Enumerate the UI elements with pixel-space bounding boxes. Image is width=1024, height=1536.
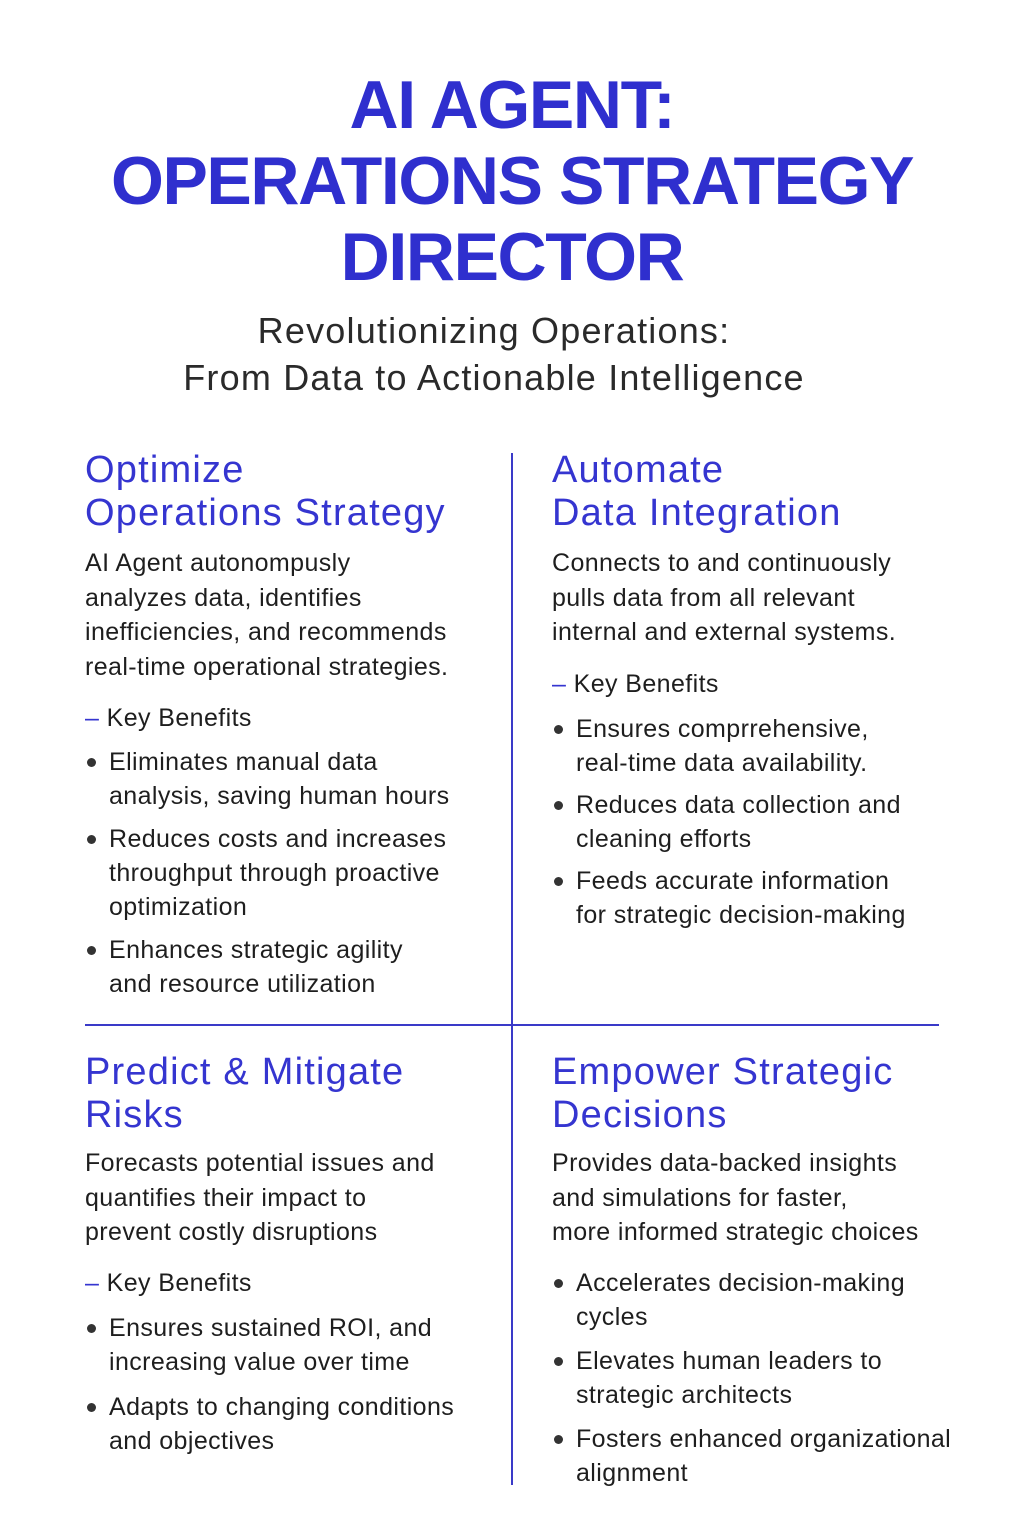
- title: AI AGENT:: [350, 67, 674, 143]
- heading: [85, 1051, 404, 1136]
- bullet list: [554, 715, 906, 929]
- heading: [85, 449, 446, 534]
- panel: optimize: analysis, saving human hours: [109, 782, 450, 810]
- panel: automate: Ensures comprrehensive,: [576, 715, 869, 743]
- panel: automate: cleaning efforts: [576, 825, 752, 853]
- description: inefficiencies, and recommends: [85, 618, 447, 646]
- heading: Empower Strategic: [552, 1051, 893, 1093]
- panel: empower: alignment: [576, 1459, 688, 1487]
- description: analyzes data, identifies: [85, 584, 362, 612]
- description: pulls data from all relevant: [552, 584, 855, 612]
- horizontal divider: [85, 1024, 939, 1026]
- panel: automate: real-time data availability.: [576, 749, 867, 777]
- bullet list: [87, 1314, 454, 1455]
- bullet list: [554, 1269, 951, 1487]
- heading: Operations Strategy: [85, 492, 446, 534]
- title: OPERATIONS STRATEGY: [111, 143, 913, 219]
- key benefits label: Key Benefits: [574, 670, 719, 698]
- subtitle: From Data to Actionable Intelligence: [183, 357, 805, 398]
- description: [552, 1149, 919, 1246]
- panel: empower: Fosters enhanced organizational: [576, 1425, 951, 1453]
- vertical divider: [511, 453, 513, 1485]
- description: Forecasts potential issues and: [85, 1149, 435, 1177]
- description: and simulations for faster,: [552, 1184, 848, 1212]
- panel: optimize: Enhances strategic agility: [109, 936, 403, 964]
- panel: automate: [552, 449, 906, 929]
- panel: predict: [85, 1051, 454, 1455]
- description: Connects to and continuously: [552, 549, 891, 577]
- panel: optimize: Reduces costs and increases: [109, 825, 446, 853]
- panel: automate: Reduces data collection and: [576, 791, 901, 819]
- panel: empower: Accelerates decision-making: [576, 1269, 905, 1297]
- heading: Decisions: [552, 1094, 728, 1136]
- panel: predict: Adapts to changing conditions: [109, 1393, 454, 1421]
- description: [85, 1149, 435, 1246]
- key benefits label: Key Benefits: [107, 704, 252, 732]
- panel: predict: and objectives: [109, 1427, 274, 1455]
- panel: empower: strategic architects: [576, 1381, 792, 1409]
- description: more informed strategic choices: [552, 1218, 919, 1246]
- description: quantifies their impact to: [85, 1184, 366, 1212]
- description: real-time operational strategies.: [85, 652, 448, 680]
- description: prevent costly disruptions: [85, 1218, 377, 1246]
- bullet list: [87, 748, 450, 998]
- heading: Data Integration: [552, 492, 842, 534]
- panel: optimize: [85, 449, 450, 998]
- heading: [552, 449, 842, 534]
- heading: Automate: [552, 449, 724, 491]
- description: Provides data-backed insights: [552, 1149, 897, 1177]
- subtitle: Revolutionizing Operations:: [258, 310, 730, 351]
- heading: Predict & Mitigate: [85, 1051, 404, 1093]
- panel: predict: increasing value over time: [109, 1348, 410, 1376]
- title: DIRECTOR: [341, 219, 683, 295]
- heading: [552, 1051, 893, 1136]
- panel: optimize: throughput through proactive: [109, 859, 440, 887]
- description: internal and external systems.: [552, 618, 896, 646]
- panel: empower: Elevates human leaders to: [576, 1347, 882, 1375]
- heading: Optimize: [85, 449, 245, 491]
- panel: empower: cycles: [576, 1303, 648, 1331]
- panel: optimize: and resource utilization: [109, 970, 376, 998]
- panel: optimize: optimization: [109, 893, 247, 921]
- panel: predict: Ensures sustained ROI, and: [109, 1314, 432, 1342]
- title: [111, 67, 914, 295]
- description: [552, 549, 896, 646]
- description: [85, 549, 448, 680]
- description: AI Agent autonompusly: [85, 549, 351, 577]
- panel: optimize: Eliminates manual data: [109, 748, 378, 776]
- panel: automate: for strategic decision-making: [576, 901, 906, 929]
- panel: empower: [552, 1051, 951, 1487]
- heading: Risks: [85, 1094, 184, 1136]
- subtitle: [183, 310, 805, 398]
- key benefits label: Key Benefits: [107, 1269, 252, 1297]
- panel: automate: Feeds accurate information: [576, 867, 889, 895]
